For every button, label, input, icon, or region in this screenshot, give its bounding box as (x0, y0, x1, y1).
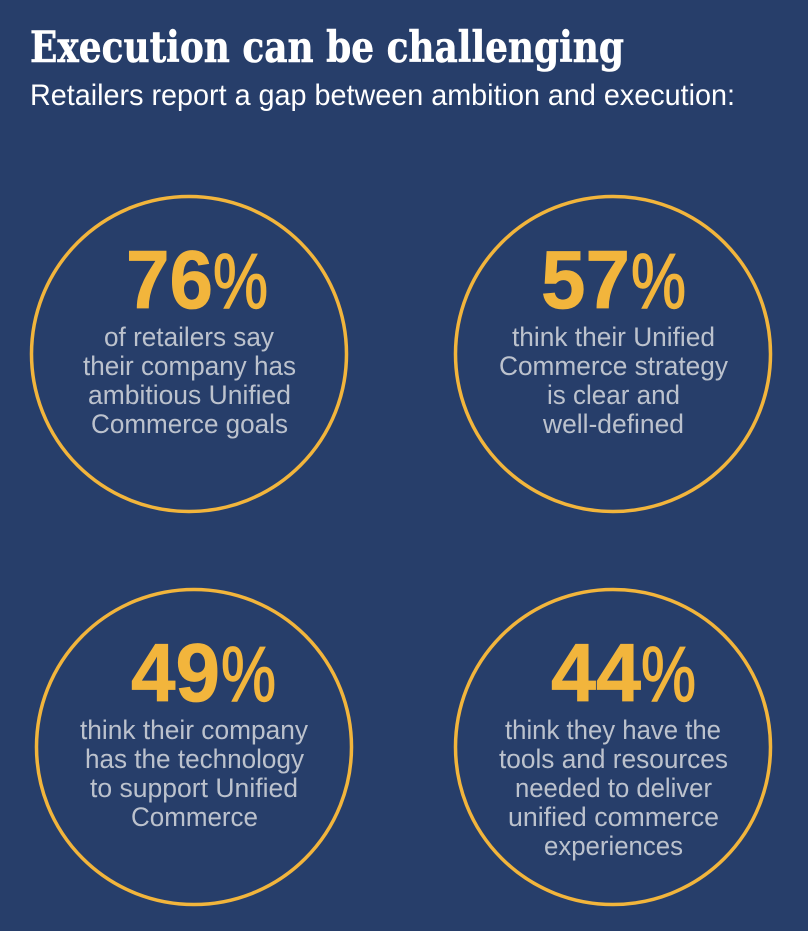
stat number: 44%: % (641, 630, 696, 718)
stat description: of retailers say (104, 322, 274, 352)
stat description: unified commerce (508, 802, 719, 832)
panel: 44% stat (456, 590, 770, 904)
stat description: think their company (80, 715, 308, 745)
subtitle: Retailers report a gap between ambition and execution: (30, 79, 735, 112)
stat description: think they have the (505, 715, 721, 745)
panel: 49% stat (36, 590, 352, 904)
stat description: well-defined (542, 409, 684, 439)
stat number: 49%: % (221, 630, 276, 718)
stat number: 44% (551, 626, 696, 719)
stat description: to support Unified (90, 773, 298, 803)
title: Execution can be challenging (30, 23, 624, 73)
stat description: Commerce (131, 802, 258, 832)
stat number: 49%: 49 (131, 626, 220, 719)
stat number: 57% (541, 233, 686, 326)
stat description: ambitious Unified (88, 380, 291, 410)
stat number: 76%: % (213, 237, 268, 325)
stat description (80, 715, 308, 832)
stat description: think their Unified (512, 322, 715, 352)
stat number: 76% (126, 233, 268, 326)
stat description: has the technology (85, 744, 304, 774)
stat description: Commerce goals (91, 409, 288, 439)
stat description: Commerce strategy (499, 351, 728, 381)
stat description (83, 322, 296, 439)
stat number: 57%: 57 (541, 233, 630, 326)
stat number: 57%: % (631, 237, 686, 325)
stat description: experiences (544, 831, 683, 861)
stat number: 44%: 44 (551, 626, 641, 719)
stat number: 76%: 76 (126, 233, 213, 326)
stat description: needed to deliver (515, 773, 712, 803)
stat number: 49% (131, 626, 276, 719)
panel: 76% stat (32, 196, 346, 512)
stat description: their company has (83, 351, 296, 381)
stat description: tools and resources (499, 744, 728, 774)
stat description: is clear and (547, 380, 680, 410)
stat description (499, 322, 728, 439)
stat description (499, 715, 728, 861)
panel: 57% stat (456, 196, 770, 512)
